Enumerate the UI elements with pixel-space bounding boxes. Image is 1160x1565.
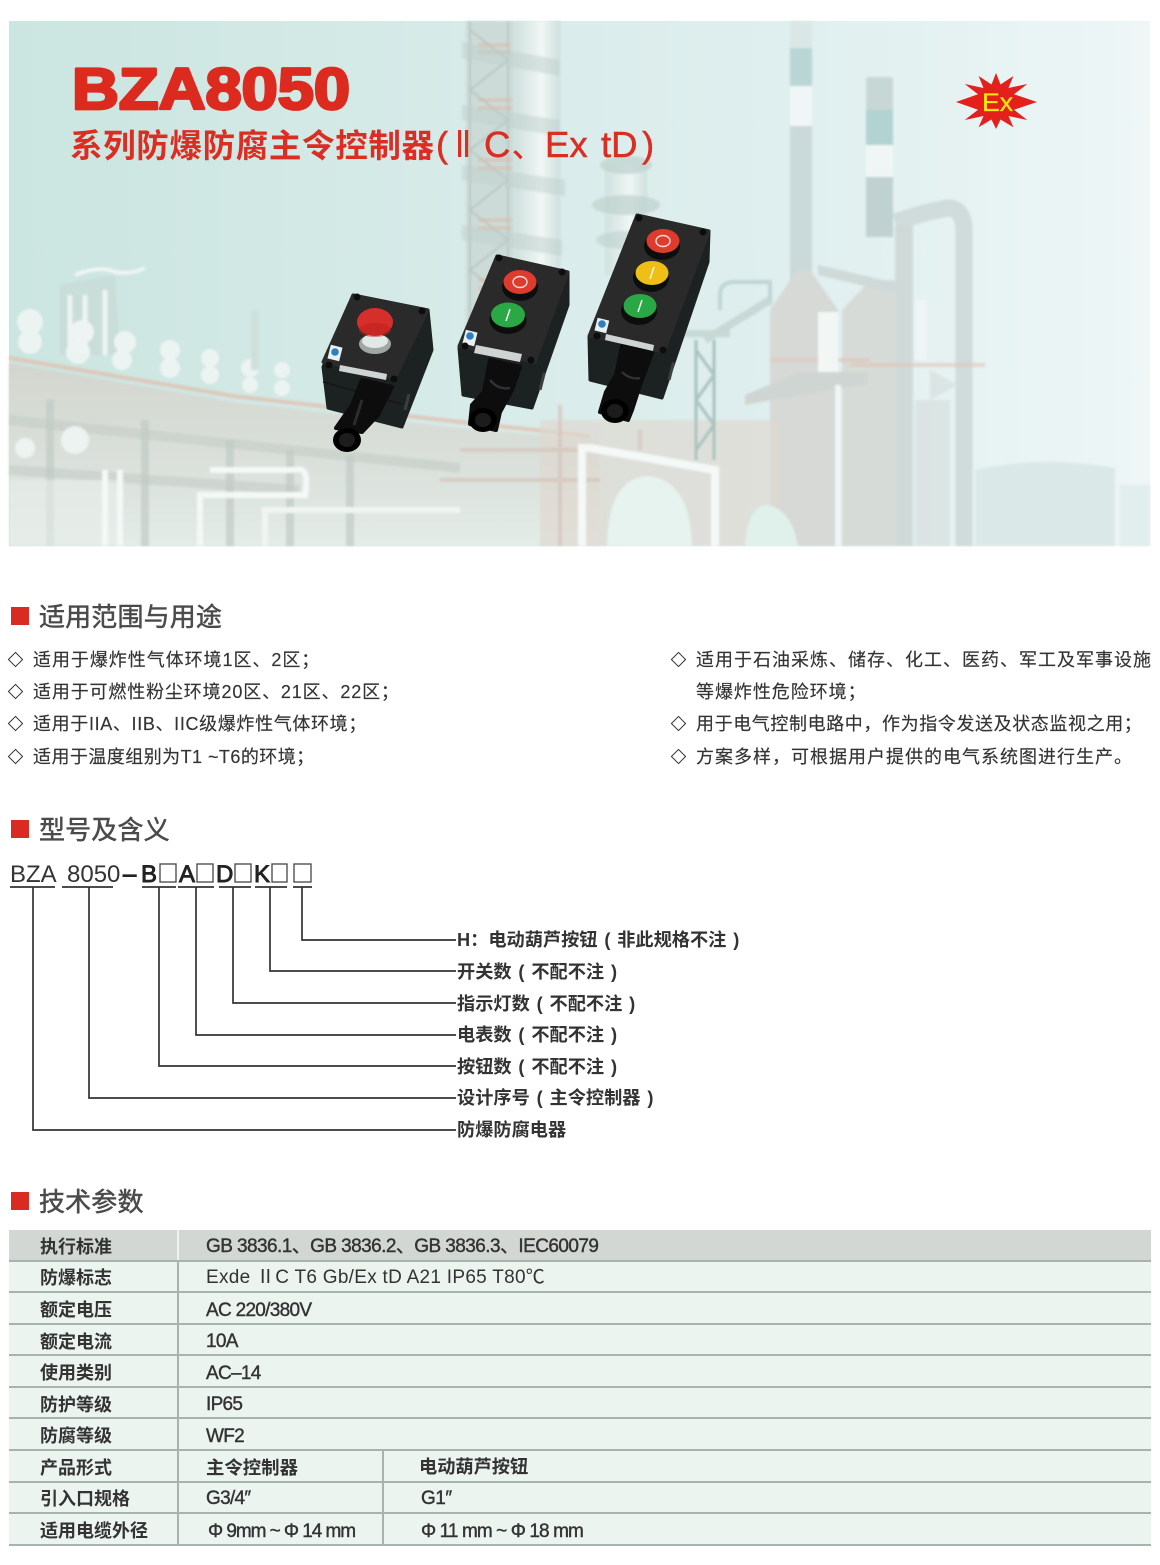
row: marking: Exde ⅡC T6 Gb/Ex tD A21 IP65 T80℃ (206, 1267, 545, 1288)
left list (8, 650, 400, 767)
row: current: 额定电流 (40, 1332, 112, 1352)
label: switches: 开关数 ( 不配不注 ) (457, 962, 617, 982)
row: cable diameter: Φ 11 mm ~ Φ 18 mm (421, 1521, 583, 1542)
centre-bottom plant (540, 420, 780, 546)
row: cable diameter: 适用电缆外径 (40, 1521, 148, 1541)
row: protection: 防护等级 (40, 1395, 112, 1415)
right list: 等爆炸性危险环境； (696, 682, 867, 702)
row: voltage (9, 1293, 1151, 1325)
row: cable diameter: Φ 9mm ~ Φ 14 mm (208, 1521, 355, 1542)
left list: 适用于爆炸性气体环境1区、2区； (33, 650, 320, 670)
label: design series: 设计序号 ( 主令控制器 ) (457, 1088, 653, 1108)
heading marker (11, 1192, 29, 1210)
product: single emergency-stop control box (323, 294, 432, 452)
row: product form (9, 1451, 1151, 1483)
model code diagram: 8050 (67, 861, 120, 888)
subtitle: Ex (545, 124, 588, 165)
row: standard: 执行标准 (40, 1237, 112, 1257)
row: standard (9, 1230, 1151, 1262)
row: cable diameter (9, 1514, 1151, 1546)
centre lattice tower background (515, 21, 560, 321)
subtitle (70, 124, 654, 165)
label: buttons: 按钮数 ( 不配不注 ) (457, 1057, 617, 1077)
subtitle: 、 (512, 131, 542, 164)
label: H: H：电动葫芦按钮 ( 非此规格不注 ) (457, 930, 739, 950)
title: BZA8050: BZA8050 (72, 57, 350, 122)
model code diagram: – (123, 861, 137, 888)
right list (670, 650, 1152, 767)
right list: 用于电气控制电路中，作为指令发送及状态监视之用； (696, 714, 1142, 734)
section heading: 技术参数 (11, 1187, 144, 1217)
model code diagram: A (179, 861, 195, 888)
label: indicators: 指示灯数 ( 不配不注 ) (457, 994, 635, 1014)
label: explosion-proof: 防爆防腐电器 (457, 1120, 566, 1140)
row: product form: 主令控制器 (206, 1457, 298, 1478)
row: inlet size: 引入口规格 (40, 1489, 130, 1509)
table: technical parameters (9, 1230, 1151, 1546)
chimneys (790, 21, 812, 341)
right list: 适用于石油采炼、储存、化工、医药、军工及军事设施 (696, 650, 1152, 670)
row: category: 使用类别 (40, 1363, 112, 1383)
subtitle: tD (601, 124, 638, 165)
row: voltage: 额定电压 (40, 1300, 112, 1320)
row: current: 10A (206, 1331, 238, 1352)
model code diagram: K (254, 861, 270, 888)
left plant (9, 363, 600, 546)
heading: 技术参数 (39, 1187, 144, 1217)
row: anti-corrosion: WF2 (206, 1426, 244, 1447)
subtitle: ) (642, 124, 654, 165)
product: three-button control box (589, 214, 709, 423)
row: protection: IP65 (206, 1394, 242, 1415)
row: inlet size: G3/4″ (206, 1488, 250, 1509)
model code diagram (10, 861, 456, 1131)
hero banner (8, 20, 1150, 547)
model code diagram: B (141, 861, 157, 888)
row: marking (9, 1262, 1151, 1293)
row: protection (9, 1388, 1151, 1419)
row: product form: 电动葫芦按钮 (419, 1457, 528, 1477)
row: anti-corrosion: 防腐等级 (40, 1426, 112, 1446)
row: standard: GB 3836.1、GB 3836.2、GB 3836.3、IEC60079 (206, 1236, 598, 1257)
row: category: AC–14 (206, 1363, 261, 1384)
heading: 适用范围与用途 (39, 602, 222, 632)
row: marking: 防爆标志 (40, 1268, 112, 1288)
row: product form: 产品形式 (40, 1458, 112, 1478)
model code diagram: D (216, 861, 233, 888)
left list: 适用于温度组别为T1 ~T6的环境； (33, 747, 315, 767)
storage tanks (975, 462, 1115, 546)
row: inlet size (9, 1483, 1151, 1514)
section: 适用范围与用途 (8, 602, 1152, 767)
subtitle: ( (436, 124, 448, 165)
model code diagram: BZA (10, 861, 57, 888)
row: voltage: AC 220/380V (206, 1300, 311, 1321)
row: category (9, 1356, 1151, 1388)
heading marker (11, 607, 29, 625)
icon: Ex explosion mark (956, 73, 1037, 129)
label: meters: 电表数 ( 不配不注 ) (457, 1025, 617, 1045)
product: two-button control box (459, 254, 568, 432)
row: inlet size: G1″ (421, 1488, 452, 1509)
subtitle: C (484, 124, 510, 165)
right list: 方案多样，可根据用户提供的电气系统图进行生产。 (696, 747, 1133, 767)
subtitle: 系列防爆防腐主令控制器 (70, 128, 434, 164)
heading: 型号及含义 (39, 815, 170, 845)
heading marker (11, 820, 29, 838)
left list: 适用于可燃性粉尘环境20区、21区、22区； (33, 682, 400, 702)
row: anti-corrosion (9, 1419, 1151, 1451)
row: current (9, 1325, 1151, 1356)
factory (770, 270, 838, 546)
section: 型号及含义 (10, 815, 739, 1140)
left list: 适用于IIA、IIB、IIC级爆炸性气体环境； (33, 714, 367, 734)
icon: Ex explosion mark: Ex (982, 89, 1014, 117)
